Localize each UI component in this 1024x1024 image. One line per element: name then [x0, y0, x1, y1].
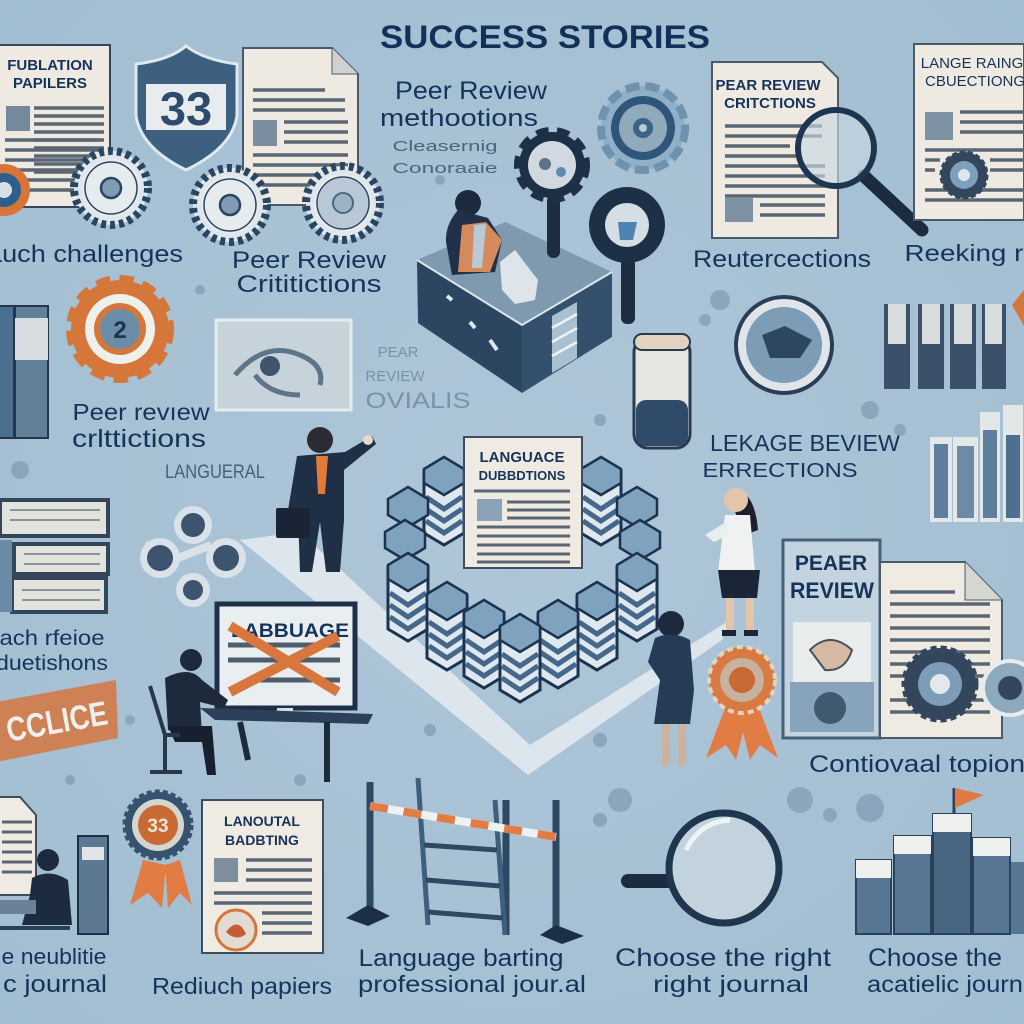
- text: peer review faint: REVIEW: [365, 368, 425, 385]
- icon: jar: [634, 334, 690, 448]
- text: the publishing journal: [2, 944, 107, 998]
- panel: document right middle: [880, 562, 1002, 738]
- panel: peer review criticisms document right: [712, 62, 838, 238]
- document: language publications: DUBBDTIONS: [479, 468, 566, 483]
- icon: magnifier gear: [519, 132, 585, 258]
- text: reach reductions: ach rfeioe: [0, 627, 105, 650]
- text: leakage review: [702, 430, 900, 482]
- text: choose the academic journal: acatielic journ: [867, 971, 1023, 997]
- document: language publications: LANGUACE: [480, 449, 564, 466]
- text: language barring: Language barting: [358, 945, 564, 972]
- text: peer review methods: Peer Review: [395, 77, 548, 105]
- text: peer review criticisms left: Peer revıew: [72, 399, 210, 425]
- text: leakage review: LEKAGE BEVIEW: [710, 430, 900, 456]
- icon: orange gear: [71, 280, 169, 378]
- text: reeking rules: Reeking ri: [904, 240, 1024, 266]
- icon: seal three: [306, 166, 380, 240]
- text: language barring: [358, 945, 586, 997]
- panel: publication papers document: FUBLATION: [7, 57, 93, 74]
- document: language publications: [464, 437, 582, 568]
- panel: peer review poster: [783, 540, 880, 738]
- icon: magnifier lower: [589, 187, 665, 324]
- illustration: server box with figure: [417, 190, 612, 393]
- panel: language document bottom: BADBTING: [225, 832, 299, 848]
- text: peer review criticisms: [232, 247, 387, 298]
- label: orange banner: CCLICE: [3, 694, 111, 750]
- icon: award ribbon 33: [125, 792, 192, 908]
- icon: award ribbon 33: 33: [147, 816, 169, 837]
- text: peer review methods: [380, 77, 548, 177]
- text: peer review criticisms left: crlttictions: [72, 425, 206, 453]
- panel: language document far right: CBUECTIONG: [925, 73, 1024, 90]
- panel: language document far right: [914, 44, 1024, 220]
- panel: publication papers document: [0, 45, 110, 207]
- panel: language document bottom: LANOUTAL: [224, 813, 300, 829]
- icon: seal two: [193, 168, 267, 242]
- icon: seal one: [74, 151, 148, 225]
- title: SUCCESS STORIES: [380, 19, 710, 55]
- panel: peer review poster: PEAER: [795, 552, 867, 575]
- text: peer review faint: OVIALIS: [366, 388, 470, 413]
- illustration: ring of servers with document: [385, 437, 660, 702]
- icon: seal right: [904, 648, 976, 720]
- panel: document bottom left: [0, 797, 36, 895]
- panel: publication papers document: PAPILERS: [13, 75, 87, 92]
- text: peer review methods: Cleasernig: [392, 138, 498, 155]
- text: peer review criticisms: Crititictions: [236, 271, 382, 298]
- text: peer review criticisms left: [72, 399, 210, 453]
- icon: barrier and ladder: [346, 778, 584, 944]
- icon: book row top right: [884, 290, 1024, 389]
- text: controversial topics: Contiovaal topion: [809, 751, 1024, 778]
- text: choose the academic journal: Choose the: [868, 944, 1002, 972]
- panel: illustration frame: [216, 320, 351, 410]
- icon: triad of nodes: [140, 506, 246, 607]
- icon: books left edge: [0, 306, 48, 438]
- panel: document top centre: [243, 48, 358, 205]
- text: the publishing journal: e neublitie: [2, 944, 106, 969]
- text: languournal: LANGUERAL: [165, 462, 265, 483]
- text: peer review faint: [365, 344, 470, 413]
- icon: orange seal left: [0, 164, 30, 216]
- figure: person at desk with monitor: [150, 604, 373, 782]
- panel: peer review criticisms document right: CRITCTIONS: [724, 95, 816, 112]
- text: choose the academic journal: [867, 944, 1023, 997]
- text: language barring: professional jour.al: [358, 971, 586, 997]
- text: choose the right journal centre: [615, 944, 831, 997]
- icon: podium columns with flag: [856, 788, 1024, 934]
- figure: woman with tablet: [705, 488, 760, 636]
- text: peer review faint: PEAR: [378, 344, 419, 361]
- text: reach reductions: [0, 627, 108, 675]
- icon: stacked books left: [0, 500, 108, 612]
- icon: circular badge: [736, 297, 832, 393]
- text: peer review methods: Conoraaie: [392, 160, 498, 177]
- figure: presenter in suit: [276, 427, 376, 572]
- text: peer review methods: methootions: [380, 105, 538, 132]
- icon: orange award ribbon: [706, 647, 778, 760]
- panel: peer review criticisms document right: PEAR REVIEW: [715, 77, 821, 94]
- label: orange banner: [0, 680, 118, 762]
- text: re-corrections: Reutercections: [693, 246, 871, 273]
- panel: language document far right: LANGE RAING: [921, 55, 1023, 72]
- text: peer review criticisms: Peer Review: [232, 247, 387, 274]
- pathway: white floor path: [240, 532, 730, 775]
- text: the publishing journal: c journal: [3, 971, 107, 998]
- icon: orange gear: 2: [113, 317, 127, 344]
- figure: woman standing: [648, 611, 694, 765]
- panel: language document bottom: [202, 800, 323, 953]
- icon: shield with number: 33: [160, 82, 212, 135]
- figure: person at computer bottom left: [0, 836, 108, 934]
- icon: seal far right: [983, 661, 1024, 715]
- figure: person at desk with monitor: LABBUAGE: [231, 621, 349, 642]
- text: reduce papers: Rediuch papiers: [152, 973, 332, 999]
- icon: large magnifier: [798, 110, 922, 230]
- icon: large magnifying glass: [628, 813, 779, 923]
- icon: small decorative doodles: [11, 175, 906, 827]
- text: leakage review: ERRECTIONS: [702, 460, 858, 482]
- text: choose the right journal centre: right journal: [653, 971, 809, 997]
- text: choose the right journal centre: Choose the right: [615, 944, 831, 972]
- icon: gear top: [601, 86, 685, 170]
- panel: peer review poster: REVIEW: [790, 578, 874, 603]
- bar chart: [930, 405, 1023, 522]
- icon: shield with number: [136, 46, 237, 170]
